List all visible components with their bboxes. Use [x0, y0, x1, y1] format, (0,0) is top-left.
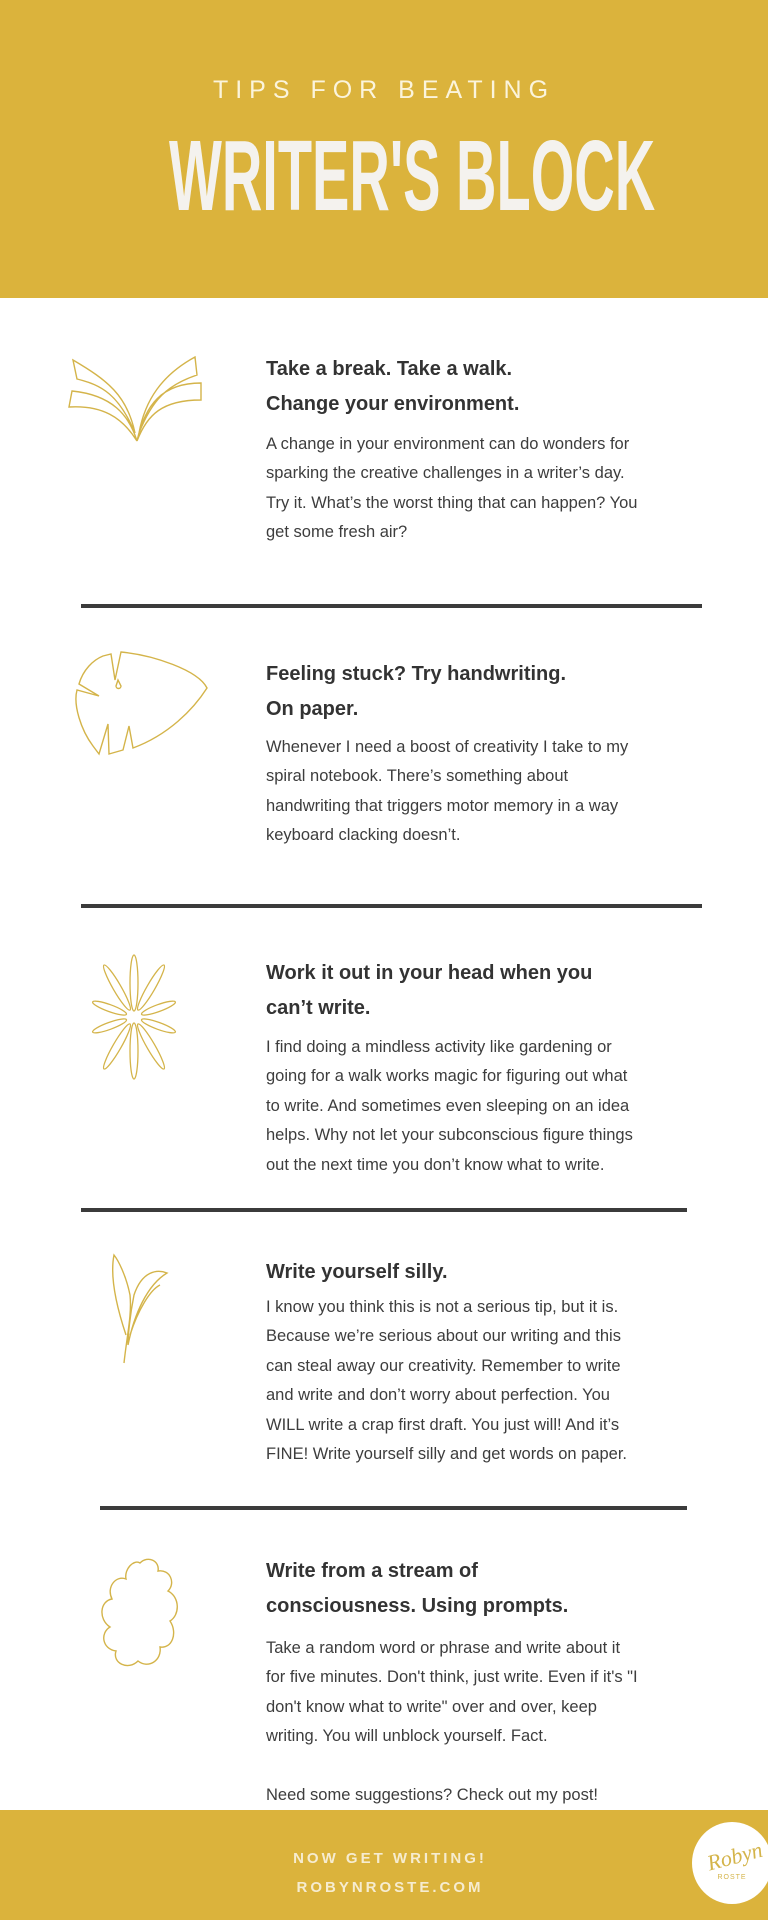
section 4 text: WILL write a crap first draft. You just will! And it’s	[266, 1416, 619, 1434]
section 5 text: for five minutes. Don't think, just write. Even if it's "I	[266, 1668, 638, 1686]
section 1 heading: Change your environment.	[266, 393, 519, 415]
section 2 text: handwriting that triggers motor memory in a way	[266, 797, 618, 815]
section 4 text: I know you think this is not a serious tip, but it is.	[266, 1298, 618, 1316]
section 1 text: sparking the creative challenges in a writer’s day.	[266, 464, 625, 482]
section 4 text	[266, 1298, 627, 1463]
icon: sprout leaves	[112, 1254, 168, 1364]
section 5 text	[266, 1639, 638, 1804]
footer text: ROBYNROSTE.COM	[296, 1879, 484, 1896]
logo	[692, 1822, 768, 1904]
section 2 heading: Feeling stuck? Try handwriting.	[266, 663, 566, 685]
section 3 text: helps. Why not let your subconscious figure things	[266, 1126, 633, 1144]
icon: open book	[68, 356, 202, 442]
icon: cloud flower	[101, 1558, 178, 1666]
title: WRITER'S BLOCK	[169, 120, 655, 232]
section 2 text: spiral notebook. There’s something about	[266, 767, 568, 785]
logo: ROSTE	[717, 1874, 747, 1881]
section 3 heading: Work it out in your head when you	[266, 962, 592, 984]
section 1 heading	[266, 358, 519, 415]
section 5 text: don't know what to write" over and over, keep	[266, 1698, 597, 1716]
section 3 text: out the next time you don’t know what to write.	[266, 1156, 604, 1174]
section 1 text: get some fresh air?	[266, 523, 407, 541]
section 5 text: Need some suggestions? Check out my post!	[266, 1786, 598, 1804]
section 5 text: writing. You will unblock yourself. Fact.	[266, 1727, 548, 1745]
section 1 text: Try it. What’s the worst thing that can happen? You	[266, 494, 637, 512]
section 2 heading: On paper.	[266, 698, 358, 720]
section 3 heading: can’t write.	[266, 997, 370, 1019]
section 5 heading: consciousness. Using prompts.	[266, 1595, 568, 1617]
section 1 heading: Take a break. Take a walk.	[266, 358, 512, 380]
section 1 text	[266, 435, 637, 541]
section 4 text: and write and don’t worry about perfection. You	[266, 1386, 610, 1404]
section 1 text: A change in your environment can do wonders for	[266, 435, 629, 453]
section 4 text: Because we’re serious about our writing and this	[266, 1327, 621, 1345]
section 2 text: keyboard clacking doesn’t.	[266, 826, 460, 844]
footer text: NOW GET WRITING!	[293, 1850, 487, 1867]
section 2 heading	[266, 663, 566, 720]
section 5 heading: Write from a stream of	[266, 1560, 478, 1582]
section 4 heading: Write yourself silly.	[266, 1261, 448, 1283]
icon: monstera leaf	[75, 651, 208, 756]
section 4 text: FINE! Write yourself silly and get words on paper.	[266, 1445, 627, 1463]
footer	[0, 1810, 768, 1920]
section 3 text: going for a walk works magic for figuring out what	[266, 1067, 627, 1085]
section 2 text: Whenever I need a boost of creativity I take to my	[266, 738, 628, 756]
header banner	[0, 0, 768, 298]
section 3 text: I find doing a mindless activity like gardening or	[266, 1038, 612, 1056]
section 3 text: to write. And sometimes even sleeping on an idea	[266, 1097, 629, 1115]
section 5 heading	[266, 1560, 568, 1617]
section 5 text: Take a random word or phrase and write about it	[266, 1639, 620, 1657]
footer text	[293, 1850, 487, 1896]
section 3 text	[266, 1038, 633, 1174]
logo: Robyn	[704, 1837, 765, 1875]
subtitle: TIPS FOR BEATING	[213, 76, 555, 104]
section 3 heading	[266, 962, 592, 1019]
section 2 text	[266, 738, 628, 844]
icon: starburst	[92, 954, 176, 1080]
section 4 text: can steal away our creativity. Remember to write	[266, 1357, 621, 1375]
